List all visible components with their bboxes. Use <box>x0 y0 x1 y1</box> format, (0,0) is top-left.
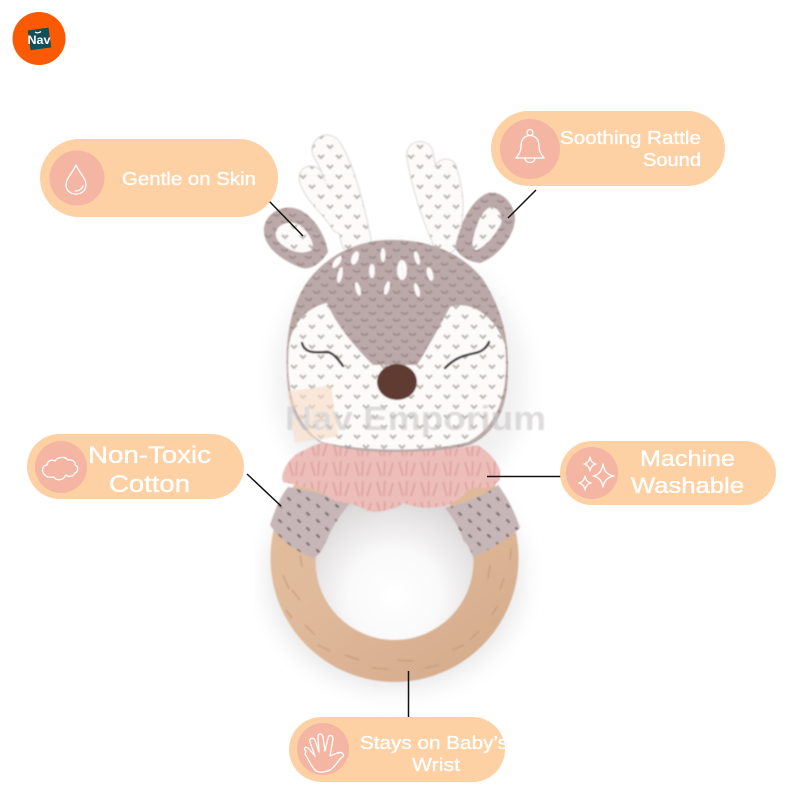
label: machine washable: Machine <box>640 446 735 471</box>
label: soothing rattle sound: Soothing Rattle <box>560 127 701 148</box>
callout: machine washable: Washable <box>631 473 744 498</box>
label: gentle on skin: Gentle on Skin <box>122 169 256 189</box>
watermark: Nav Emporium: Nav Emporium <box>285 400 546 438</box>
left arm sleeve <box>270 487 350 558</box>
callout: soothing rattle sound <box>491 111 725 186</box>
left ear <box>264 208 328 268</box>
callout: stays on baby's wrist <box>289 717 508 782</box>
connector: non-toxic cotton <box>247 474 281 506</box>
connector: machine washable <box>487 476 562 478</box>
watermark: Nav Emporium <box>285 385 546 443</box>
icon: cloud <box>43 457 78 480</box>
right ear <box>455 193 515 263</box>
connector: gentle on skin <box>269 201 303 236</box>
icon: sparkles <box>579 457 614 490</box>
wooden ring <box>270 434 518 682</box>
product photo: crochet deer rattle <box>264 150 546 690</box>
forehead spots <box>331 248 435 297</box>
callout: non-toxic cotton: Cotton <box>109 471 190 498</box>
antlers <box>311 150 452 240</box>
callout: machine washable <box>560 441 776 505</box>
callout: soothing rattle sound: Sound <box>643 149 701 170</box>
icon: bell <box>516 130 544 162</box>
logo badge <box>12 12 66 65</box>
nose <box>377 364 417 400</box>
white face <box>288 303 506 450</box>
label: non-toxic cotton: Non-Toxic <box>88 442 211 469</box>
deer head <box>287 240 508 453</box>
callout: non-toxic cotton <box>27 434 244 499</box>
right arm sleeve <box>445 485 520 557</box>
callout: stays on baby's wrist: Wrist <box>412 754 460 775</box>
pink scalloped collar <box>282 443 500 512</box>
connector: stays on wrist <box>408 671 410 717</box>
callout: gentle on skin <box>40 139 278 217</box>
logo badge: Nav <box>28 35 51 47</box>
label: stays on baby's wrist: Stays on Baby’s <box>360 732 508 753</box>
icon: hand <box>305 734 344 772</box>
connector: rattle sound <box>508 190 536 218</box>
icon: water drop <box>66 165 86 194</box>
closed eyes <box>302 342 489 368</box>
